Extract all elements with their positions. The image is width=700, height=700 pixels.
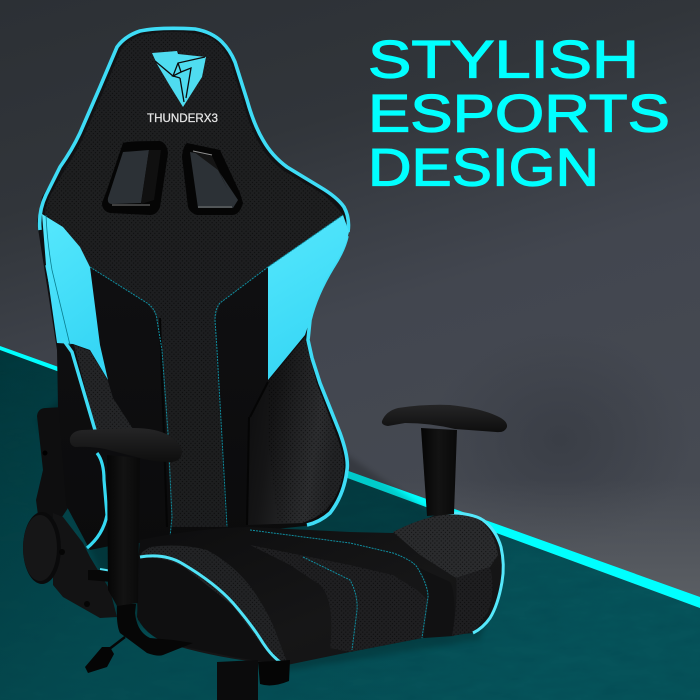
left cyan side panel [42,214,108,380]
tilt knob and mechanism [23,450,117,618]
backrest cyan piping [40,28,348,525]
left lower piping [62,338,95,430]
seat right bolster [393,514,498,578]
right lower bolster [248,337,344,525]
seat left bolster front [137,558,284,665]
lower left cyan piping [87,453,107,548]
logo emblem [152,51,206,107]
tilt bracket plate [36,407,70,520]
seat left bolster [140,546,287,665]
cyan diagonal stripe [0,346,700,608]
right armrest pad [382,405,507,432]
right armrest post [421,428,457,516]
teal stitching on backrest [90,215,343,537]
backrest side seams [160,318,268,527]
left lower bolster [74,345,135,432]
seat left cyan piping [140,556,283,664]
seat perforated panel [250,545,428,652]
heading line 2: ESPORTS [368,84,670,144]
logo wordmark: THUNDERX3 [147,111,218,125]
seat dark band [417,567,454,638]
seat teal stitching [250,530,428,650]
perforated headrest and shoulder area [45,32,343,527]
left headrest slot [102,141,168,215]
chair [23,28,507,700]
chair shadow [37,400,500,670]
teal floor [0,340,700,700]
seat right bolster front [452,567,493,636]
seat body [136,513,503,665]
dark stitch on left cyan panel [46,215,70,345]
seat bracket [117,604,193,656]
heading [368,30,670,198]
backrest black silhouette [37,28,349,550]
heading line 1: STYLISH [368,30,639,90]
right cyan side panel [268,215,349,380]
tilt lever [85,637,125,673]
gas lift column [217,660,290,700]
left armrest pad [70,428,182,462]
right headrest slot [182,143,243,215]
heading line 3: DESIGN [368,138,599,198]
left armrest post [107,455,140,606]
seat right cyan piping [443,513,503,633]
